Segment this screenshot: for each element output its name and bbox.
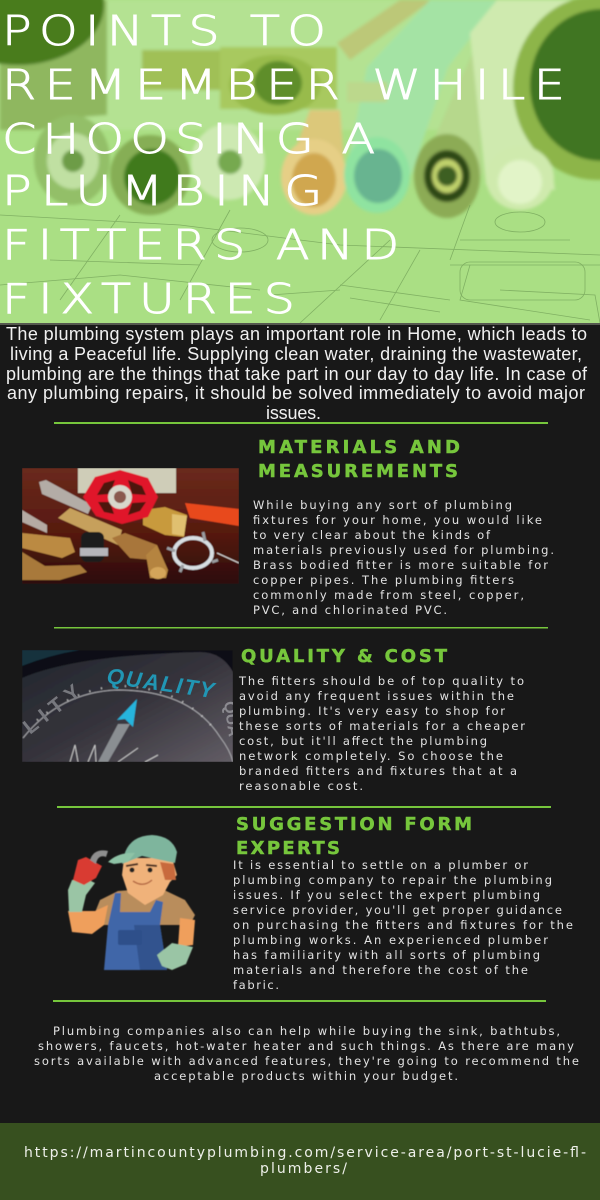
body: suggestion form experts: materials and therefore the cost of the [233,963,528,977]
title: FIXTURES [2,275,295,323]
body: suggestion form experts: service provider, you'll get proper guidance [233,903,562,917]
photo: brass valves with red wheel [22,468,239,584]
closing paragraph: Plumbing companies also can help while buying the sink, bathtubs, [53,1024,560,1038]
body: quality and cost: avoid any frequent issues within the [239,689,514,703]
closing paragraph: sorts available with advanced features, they're going to recommend the [34,1054,579,1068]
heading: suggestion form experts [236,814,472,859]
body: materials and measurements: PVC, and chlorinated PVC. [253,603,447,617]
divider 2 [54,627,548,628]
body: quality and cost: cost, but it'll affect the plumbing [239,734,487,748]
header photo: plumbing pipes on blueprint [0,0,600,323]
title: PLUMBING [2,167,322,215]
body: materials and measurements: Brass bodied fitter is more suitable for [253,558,548,572]
body: suggestion form experts: has familiarity with all sorts of plumbing [233,948,540,962]
body: materials and measurements: commonly made from steel, copper, [253,588,524,602]
closing paragraph [34,1024,579,1083]
closing paragraph: acceptable products within your budget. [154,1069,458,1083]
body: quality and cost: The fitters should be of top quality to [238,674,524,688]
title: REMEMBER WHILE [2,61,565,109]
body: quality and cost: network completely. So choose the [239,749,503,763]
gauge lettering: QUA [220,700,242,738]
title: POINTS TO [2,7,326,55]
intro paragraph: issues. [266,403,321,423]
body: quality and cost: plumbing. It's very easy to shop for [239,704,505,718]
intro paragraph: any plumbing repairs, it should be solved immediately to avoid major [7,383,585,403]
body: quality and cost: reasonable cost. [239,779,363,793]
body: suggestion form experts: fabric. [233,978,279,992]
body: suggestion form experts: on purchasing the fitters and fixtures for the [233,918,573,932]
heading: materials and measurements: MEASUREMENTS [258,461,458,482]
photo: quality gauge [19,650,242,762]
body: suggestion form experts [233,858,573,992]
body: materials and measurements: copper pipes. The plumbing fitters [253,573,514,587]
intro paragraph [6,324,588,423]
body: quality and cost: branded fitters and fixtures that at a [239,764,517,778]
closing paragraph: showers, faucets, hot-water heater and such things. As there are many [38,1039,574,1053]
intro paragraph: The plumbing system plays an important role in Home, which leads to [6,324,587,344]
gauge lettering: LITY [19,680,85,739]
body: materials and measurements: While buying any sort of plumbing [253,498,512,512]
body: materials and measurements: fixtures for your home, you would like [253,513,542,527]
body: quality and cost [238,674,525,793]
body: quality and cost: these sorts of materials for a cheaper [239,719,525,733]
divider 3 [57,806,551,808]
heading: quality and cost: QUALITY & COST [241,646,448,667]
body: materials and measurements: materials previously used for plumbing. [253,543,554,557]
body: materials and measurements [253,498,554,617]
heading: materials and measurements [258,437,460,482]
intro paragraph: living a Peaceful life. Supplying clean water, draining the wastewater, [10,344,582,364]
gauge lettering: QUALITY [105,663,218,703]
heading: suggestion form experts: SUGGESTION FORM [236,814,472,835]
title [2,7,565,323]
divider 4 [53,1000,546,1002]
body: materials and measurements: to very clear about the kinds of [253,528,491,542]
intro paragraph: plumbing are the things that take part in our day to day life. In case of [6,364,588,384]
body: suggestion form experts: It is essential to settle on a plumber or [233,858,528,872]
body: suggestion form experts: issues. If you select the expert plumbing [233,888,540,902]
gauge lettering [22,669,233,737]
footer url [24,1145,586,1177]
footer url: https://martincountyplumbing.com/service-area/port-st-lucie-fl- [24,1145,586,1161]
footer band [0,1123,600,1200]
illustration: plumber with wrench [68,835,195,970]
header divider [0,323,600,325]
title: FITTERS AND [2,221,399,269]
divider 1 [54,422,548,424]
title: CHOOSING A [2,115,375,163]
heading: suggestion form experts: EXPERTS [236,838,340,859]
body: suggestion form experts: plumbing works. An experienced plumber [233,933,548,947]
heading: materials and measurements: MATERIALS AND [258,437,460,458]
footer url: plumbers/ [260,1161,347,1177]
body: suggestion form experts: plumbing company to repair the plumbing [233,873,552,887]
